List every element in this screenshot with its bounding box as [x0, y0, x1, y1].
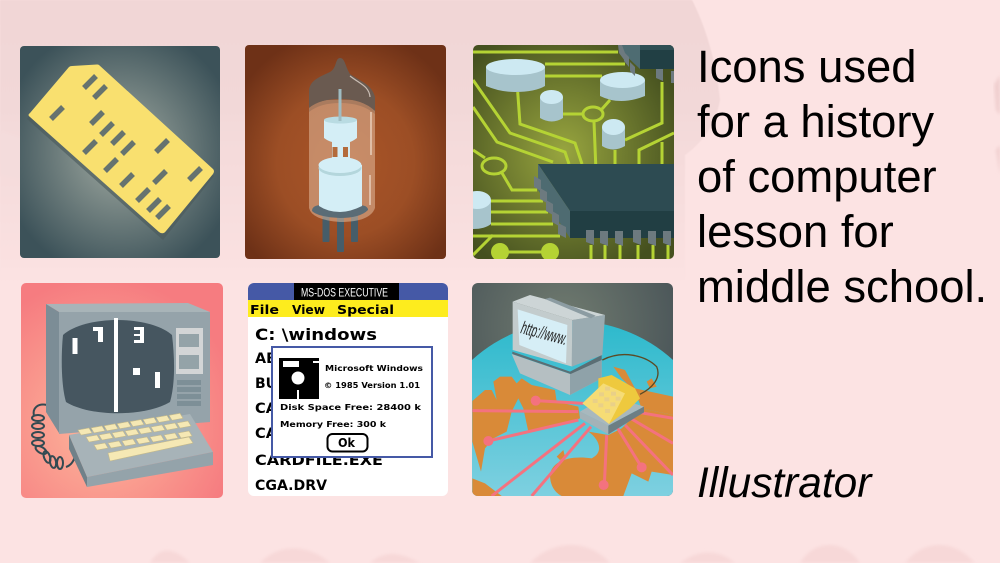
- tube glass: [309, 100, 375, 222]
- floppy disk icon: [279, 358, 319, 399]
- heading: [697, 41, 987, 312]
- heading: Icons used: [697, 41, 917, 92]
- file list: [255, 325, 383, 494]
- tube upper cylinder: [324, 120, 357, 158]
- about dialog: Memory Free: 300 k: [280, 420, 387, 429]
- heading: middle school.: [697, 261, 987, 312]
- menu bar: File: [250, 302, 279, 317]
- about dialog: Disk Space Free: 28400 k: [280, 403, 422, 412]
- phone cable: [602, 355, 658, 394]
- capacitors: [463, 59, 645, 229]
- menu bar: [248, 300, 448, 317]
- file list: CGA.DRV: [255, 478, 327, 494]
- heading: lesson for: [697, 206, 894, 257]
- tube base: [312, 205, 368, 218]
- monitor screen address text: http://www.: [519, 318, 570, 349]
- microchip top right: [618, 45, 674, 83]
- circuit traces: [473, 52, 674, 259]
- punched card shadow: [30, 118, 214, 240]
- about dialog: [272, 347, 432, 457]
- network links: [472, 401, 673, 496]
- menu bar: Special: [337, 302, 394, 317]
- circuit solder pads: [491, 243, 559, 259]
- icon panel: punched card: [20, 46, 220, 258]
- coiled cable: [32, 405, 75, 469]
- microchip main: [534, 164, 674, 246]
- OK button: Ok: [338, 435, 356, 450]
- icon panel: vacuum tube: [245, 45, 446, 259]
- icon panel: retro computer with pong: [21, 283, 223, 498]
- file list: CA: [255, 426, 277, 442]
- file list: CARDFILE.EXE: [255, 453, 383, 469]
- network nodes: [483, 396, 647, 490]
- telephone: [580, 375, 644, 434]
- OK button: [328, 434, 368, 452]
- pong screen: [62, 320, 174, 413]
- about dialog: Microsoft Windows: [325, 364, 423, 373]
- title bar: [248, 283, 448, 300]
- CRT monitor: [512, 295, 605, 395]
- globe: [472, 321, 673, 496]
- file list: BU: [255, 376, 277, 392]
- icon panel: internet globe: [472, 283, 673, 496]
- about dialog: © 1985 Version 1.01: [324, 381, 420, 390]
- heading: for a history: [697, 96, 934, 147]
- file list: CA: [255, 401, 277, 417]
- icon panel: circuit board: [463, 45, 674, 261]
- file list: AB: [255, 351, 277, 367]
- continents: [472, 367, 673, 496]
- punched card: [28, 64, 214, 233]
- tube pins: [322, 212, 358, 252]
- title bar: MS-DOS EXECUTIVE: [301, 286, 388, 300]
- computer monitor: [46, 303, 210, 434]
- tube top dome: [309, 58, 375, 111]
- file list: C: \windows: [255, 325, 377, 344]
- credit: Illustrator: Illustrator: [697, 459, 871, 506]
- control panel: [176, 328, 203, 374]
- keyboard: [69, 413, 213, 487]
- menu bar: View: [292, 302, 325, 317]
- icon panel: Windows 1.01 about screen: [248, 283, 448, 496]
- heading: of computer: [697, 151, 937, 202]
- tube lower cylinder: [319, 165, 362, 212]
